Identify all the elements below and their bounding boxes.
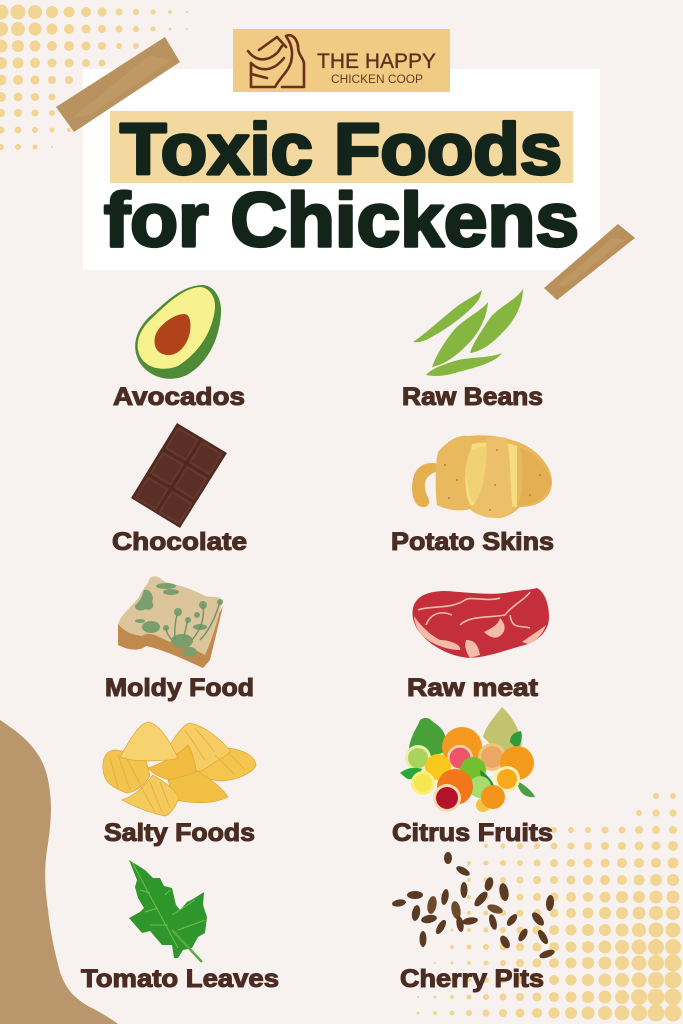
logo icon: chicken coop — [248, 35, 304, 87]
label: Avocados: Avocados — [113, 383, 245, 411]
icon: citrus fruits — [400, 707, 535, 812]
icon: potato skins — [412, 435, 552, 518]
icon: moldy bread — [118, 576, 223, 668]
logo wordmark — [317, 50, 436, 86]
tape: top left — [56, 37, 180, 132]
label: Citrus Fruits: Citrus Fruits — [392, 819, 553, 847]
logo wordmark: CHICKEN COOP — [331, 74, 423, 86]
title line 1: Toxic Foods — [120, 110, 562, 190]
label: Chocolate: Chocolate — [112, 528, 247, 556]
label: Tomato Leaves: Tomato Leaves — [81, 965, 279, 993]
label: Raw meat: Raw meat — [407, 674, 539, 702]
label: Raw Beans: Raw Beans — [402, 383, 543, 411]
icon: chocolate bar — [131, 423, 227, 528]
icon: raw meat — [412, 588, 549, 658]
icon: tomato leaf — [129, 860, 207, 962]
title line 2: for Chickens — [104, 178, 579, 263]
label: Moldy Food: Moldy Food — [105, 674, 254, 702]
white title panel — [83, 69, 600, 270]
tape: right — [544, 224, 635, 300]
label: Salty Foods: Salty Foods — [104, 819, 255, 847]
logo badge — [233, 29, 450, 92]
icon: salty chips — [103, 722, 256, 816]
label: Cherry Pits: Cherry Pits — [400, 965, 544, 993]
icon: raw beans — [413, 289, 523, 376]
logo wordmark: THE HAPPY — [317, 50, 436, 73]
title highlight — [110, 111, 573, 183]
brown corner blob — [0, 720, 118, 1024]
icon: avocado — [135, 285, 221, 379]
label: Potato Skins: Potato Skins — [391, 528, 554, 556]
icon: cherry pits — [391, 852, 556, 960]
